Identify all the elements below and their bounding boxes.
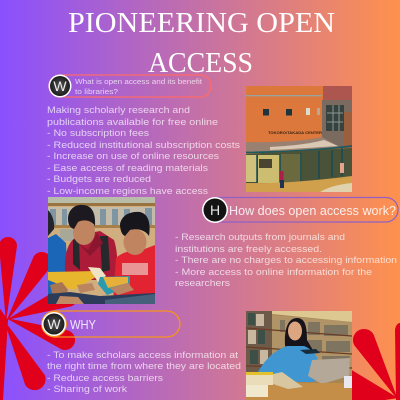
heading pill: what is open access: to libraries? xyxy=(75,89,118,96)
text block: definition and benefits xyxy=(47,104,240,196)
text block: definition and benefits: - Reduced institutional subscription costs xyxy=(47,139,240,150)
text block: why open access: - To make scholars access information at xyxy=(47,349,238,360)
sign text on building: TOKORO/TAKADA CENTER xyxy=(268,130,322,135)
text block: definition and benefits: Making scholarly research and xyxy=(47,104,190,115)
heading pill: why: WHY xyxy=(70,318,97,332)
title: ACCESS xyxy=(148,47,253,79)
heading pill: why xyxy=(41,311,180,337)
panel: what is open access xyxy=(47,74,240,196)
text block: why open access: - Sharing of work xyxy=(47,383,127,394)
boy at right in red shirt xyxy=(113,212,155,300)
text block: how it works: - There are no charges to accessing information xyxy=(175,254,397,265)
text block: how it works: institutions are freely accessed. xyxy=(175,243,322,254)
heading pill: why: W xyxy=(47,316,61,332)
books and desk xyxy=(246,383,352,400)
heading pill: what is open access: What is open access and its benefit xyxy=(75,79,202,86)
text block: definition and benefits: - Increase on use of online resources xyxy=(47,150,219,161)
text block: why open access: the right time from where they are located xyxy=(47,360,241,371)
heading pill: how does open access work: How does open access work? xyxy=(229,204,396,218)
text block: how it works: - More access to online information for the xyxy=(175,266,372,277)
panel: how does open access work xyxy=(175,197,398,288)
student xyxy=(255,318,320,382)
photo: student at laptop xyxy=(246,311,352,400)
title xyxy=(68,7,335,79)
decoration: left red flower xyxy=(0,237,78,400)
text block: how it works xyxy=(175,231,397,288)
title: PIONEERING OPEN xyxy=(68,7,335,39)
text block: definition and benefits: publications available for free online xyxy=(47,116,218,127)
text block: why open access: - Reduce access barriers xyxy=(47,372,163,383)
text block: definition and benefits: - Low-income regions have access xyxy=(47,185,208,196)
text block: how it works: - Research outputs from journals and xyxy=(175,231,345,242)
photo: library building xyxy=(246,86,352,192)
open book xyxy=(48,267,130,295)
text block: definition and benefits: - No subscription fees xyxy=(47,127,149,138)
heading pill: what is open access: W xyxy=(53,78,67,94)
text block: definition and benefits: - Ease access of reading materials xyxy=(47,162,208,173)
hands and legs xyxy=(50,282,68,294)
heading pill: what is open access xyxy=(48,74,211,98)
laptop xyxy=(308,358,350,384)
boy at left in blue xyxy=(48,210,66,294)
photo: boys reading xyxy=(48,197,155,304)
text block: why open access xyxy=(47,349,241,394)
heading pill: how does open access work: H xyxy=(210,202,220,218)
decoration: right red flower xyxy=(345,323,400,400)
text block: how it works: researchers xyxy=(175,277,230,288)
boy in centre in red xyxy=(65,205,117,280)
text block: definition and benefits: - Budgets are reduced xyxy=(47,173,151,184)
heading pill: how does open access work xyxy=(202,197,398,223)
panel: why xyxy=(41,311,241,394)
